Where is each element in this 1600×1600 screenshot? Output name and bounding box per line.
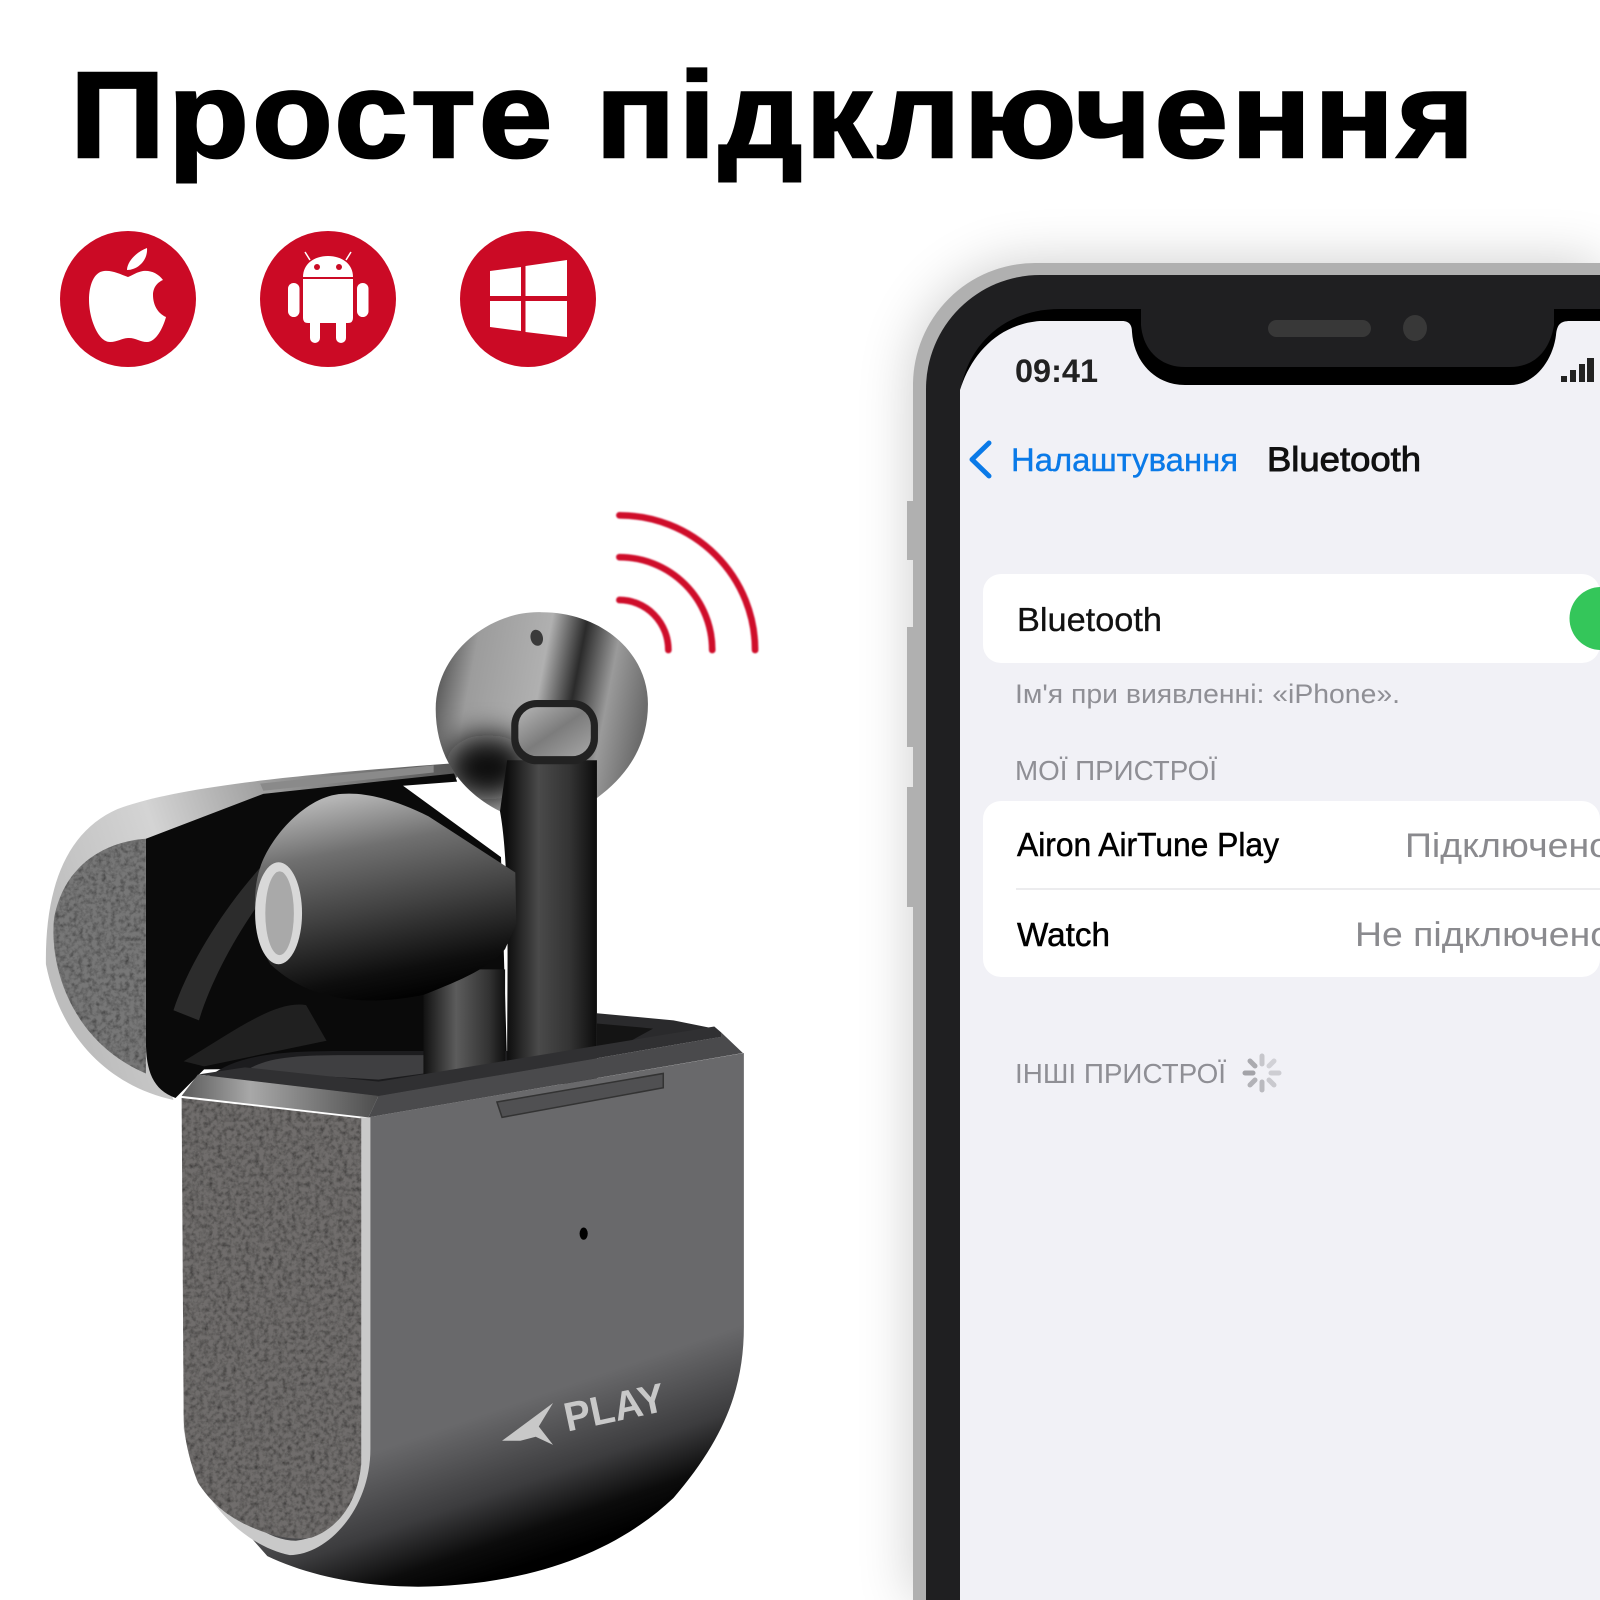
phone screen	[960, 321, 1600, 1600]
indicator light	[580, 1228, 588, 1240]
lying earbud	[255, 794, 516, 1082]
status bar time: 09:41	[1015, 353, 1098, 389]
icon: apple	[60, 231, 196, 367]
brand logo	[502, 1374, 669, 1445]
case well	[209, 1013, 721, 1097]
title: Просте підключення	[70, 47, 1474, 183]
devices list: Не підключено	[1355, 916, 1600, 954]
my devices heading: МОЇ ПРИСТРОЇ	[1015, 755, 1217, 786]
bluetooth row	[983, 574, 1600, 663]
icon: android	[260, 231, 396, 367]
bluetooth row: Bluetooth	[1017, 601, 1162, 638]
back link: Налаштування	[1011, 442, 1238, 478]
back chevron	[972, 443, 989, 476]
loading spinner	[1245, 1056, 1279, 1090]
phone frame	[913, 263, 1600, 1600]
wireless signal arcs	[619, 515, 755, 650]
devices list: Airon AirTune Play	[1017, 826, 1279, 863]
side buttons	[907, 501, 915, 907]
leather panel	[182, 1098, 361, 1539]
other devices heading: ІНШІ ПРИСТРОЇ	[1015, 1058, 1226, 1089]
case lid	[46, 763, 507, 1100]
charging case body	[182, 1027, 744, 1587]
icon: windows	[460, 231, 596, 367]
phone	[907, 263, 1600, 1600]
brand logo: PLAY	[560, 1374, 669, 1440]
signal bars	[1561, 358, 1594, 382]
earbuds and charging case	[46, 612, 744, 1587]
notch	[1141, 300, 1554, 367]
discoverable note: Ім'я при виявленні: «iPhone».	[1015, 679, 1400, 709]
upright earbud	[436, 612, 648, 1061]
phone soft shadow	[913, 263, 1600, 1600]
screen title: Bluetooth	[1267, 441, 1421, 479]
devices list: Підключено	[1405, 827, 1600, 865]
devices list: Watch	[1017, 916, 1110, 953]
case rim	[198, 1027, 721, 1096]
devices list	[983, 801, 1600, 977]
